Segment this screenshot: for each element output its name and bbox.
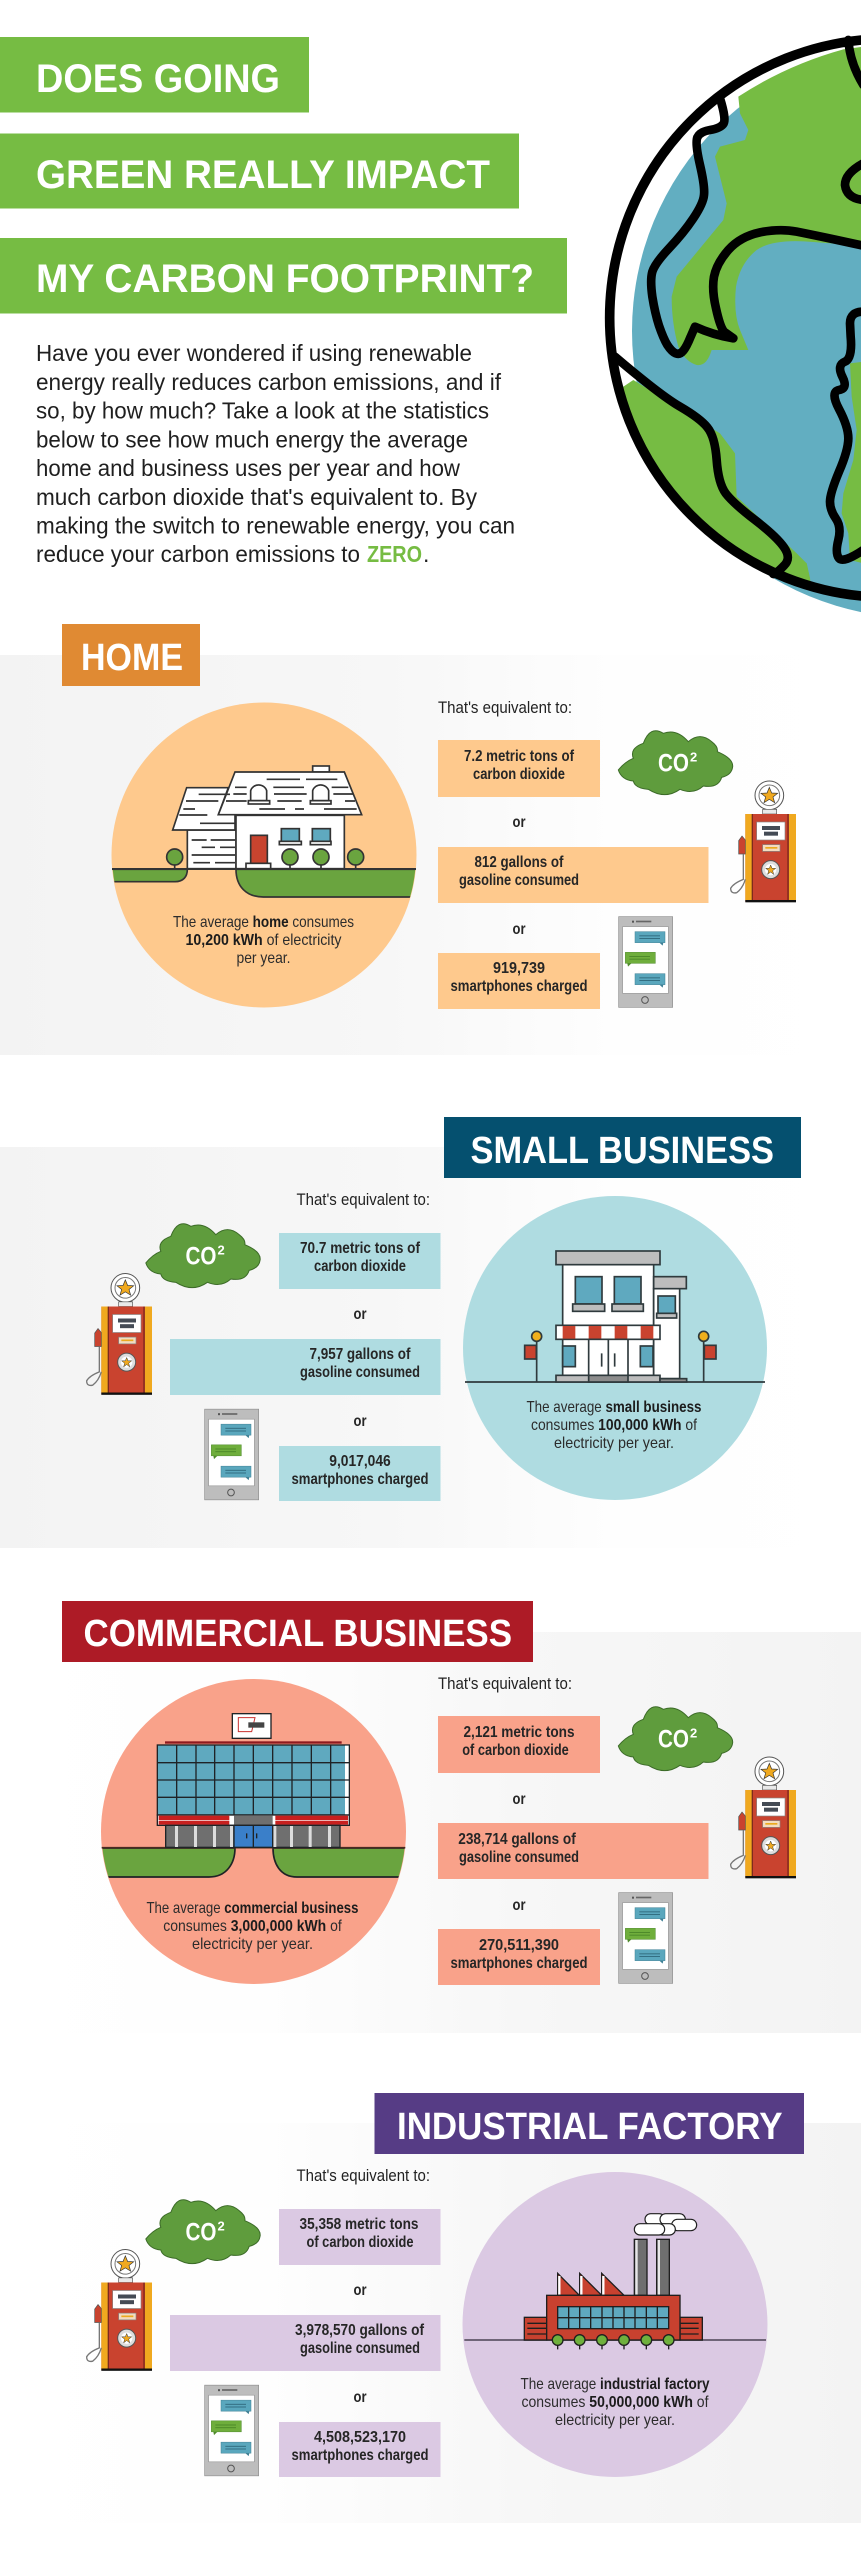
stat text: home: per year. xyxy=(236,950,290,967)
equivalents: commercial business: gasoline consumed xyxy=(459,1849,579,1866)
equivalents: home: or xyxy=(512,814,526,831)
equivalents: commercial business: 2,121 metric tons xyxy=(464,1724,575,1741)
intro text block xyxy=(36,340,515,567)
equivalents: commercial business xyxy=(438,1675,708,1985)
equivalents: commercial business: That's equivalent to: xyxy=(438,1675,572,1693)
stat text: industrial factory: consumes 50,000,000 kWh of xyxy=(522,2394,709,2411)
heading: small business: SMALL BUSINESS xyxy=(470,1130,774,1172)
panel: home xyxy=(0,624,861,1055)
icon: gas pump xyxy=(87,2249,152,2371)
circle: factory illustration and stat xyxy=(462,2172,768,2477)
illustration: house xyxy=(110,766,420,897)
equivalents: industrial factory: That's equivalent to: xyxy=(296,2167,430,2185)
equivalents: industrial factory: smartphones charged xyxy=(292,2447,428,2464)
heading: small business xyxy=(444,1117,801,1178)
icon: smartphone xyxy=(619,1893,673,1983)
stat text: home: 10,200 kWh of electricity xyxy=(186,932,342,949)
heading: industrial factory: INDUSTRIAL FACTORY xyxy=(397,2106,782,2148)
equivalents: commercial business: 238,714 gallons of xyxy=(458,1831,576,1848)
heading: commercial business: COMMERCIAL BUSINESS xyxy=(84,1613,512,1655)
equivalents: home: or xyxy=(512,921,526,938)
intro text block: much carbon dioxide that's equivalent to. By xyxy=(36,484,477,510)
heading: home xyxy=(62,624,200,686)
equivalents: industrial factory xyxy=(170,2167,440,2477)
equivalents: small business: or xyxy=(354,1413,366,1430)
equivalents: industrial factory: 35,358 metric tons xyxy=(300,2216,419,2233)
title: does going green really impact my carbon footprint xyxy=(0,37,567,314)
stat text: home xyxy=(173,914,354,967)
heading: commercial business xyxy=(62,1601,533,1662)
heading: home: HOME xyxy=(81,637,183,679)
icon: gas pump xyxy=(87,1273,152,1395)
icon: co2 cloud: CO xyxy=(658,750,689,778)
panel: commercial business xyxy=(0,1601,861,2033)
circle: small business illustration and stat xyxy=(463,1196,767,1500)
intro text block: . xyxy=(423,541,429,567)
equivalents: industrial factory: or xyxy=(354,2282,366,2299)
intro text block: so, by how much? Take a look at the statistics xyxy=(36,398,489,424)
equivalents: small business: or xyxy=(354,1306,366,1323)
icon: co2 cloud xyxy=(146,1224,260,1288)
icon: smartphone xyxy=(205,1409,259,1500)
stat text: small business xyxy=(526,1399,702,1452)
equivalents: commercial business: or xyxy=(512,1897,526,1914)
equivalents: small business: carbon dioxide xyxy=(314,1258,406,1275)
icon: co2 cloud xyxy=(146,2200,260,2264)
panel: industrial factory xyxy=(0,2093,861,2523)
icon: globe xyxy=(610,39,861,618)
illustration: factory xyxy=(464,2214,766,2349)
icon: co2 cloud xyxy=(618,1707,733,1771)
illustration: shop xyxy=(465,1251,765,1382)
intro text block: energy really reduces carbon emissions, and if xyxy=(36,369,502,395)
illustration: office building xyxy=(100,1714,407,1877)
stat text: small business: electricity per year. xyxy=(554,1435,674,1452)
icon: co2 cloud: 2 xyxy=(218,1242,225,1258)
icon: co2 cloud: 2 xyxy=(218,2218,225,2234)
title: does going green really impact my carbon footprint: MY CARBON FOOTPRINT? xyxy=(36,257,534,301)
stat text: small business: consumes 100,000 kWh of xyxy=(531,1417,697,1434)
equivalents: home: smartphones charged xyxy=(450,978,588,995)
stat text: commercial business xyxy=(146,1900,359,1953)
equivalents: small business xyxy=(170,1191,440,1501)
icon: co2 cloud: CO xyxy=(186,2218,216,2246)
equivalents: small business: gasoline consumed xyxy=(300,1364,420,1381)
equivalents: small business: 9,017,046 xyxy=(329,1453,391,1470)
circle: home illustration and stat xyxy=(110,702,420,1008)
equivalents: commercial business: 270,511,390 xyxy=(479,1937,559,1954)
equivalents: home: That's equivalent to: xyxy=(438,699,572,717)
intro text block: reduce your carbon emissions to xyxy=(36,541,360,567)
icon: smartphone xyxy=(205,2385,259,2476)
equivalents: home: gasoline consumed xyxy=(459,872,579,889)
intro text block: making the switch to renewable energy, you can xyxy=(36,512,515,538)
equivalents: industrial factory: 4,508,523,170 xyxy=(314,2429,406,2446)
equivalents: industrial factory: gasoline consumed xyxy=(300,2340,420,2357)
equivalents: home: 919,739 xyxy=(493,960,545,977)
intro text block: below to see how much energy the average xyxy=(36,426,468,452)
equivalents: home: 7.2 metric tons of xyxy=(464,748,575,765)
title: does going green really impact my carbon footprint: DOES GOING xyxy=(36,57,280,101)
circle: commercial illustration and stat xyxy=(100,1679,407,1984)
stat text: commercial business: electricity per year. xyxy=(192,1936,313,1953)
equivalents: small business: 7,957 gallons of xyxy=(310,1346,411,1363)
equivalents: commercial business: of carbon dioxide xyxy=(462,1742,569,1759)
equivalents: small business: That's equivalent to: xyxy=(296,1191,430,1209)
intro text block: ZERO xyxy=(367,541,422,567)
icon: co2 cloud: 2 xyxy=(690,1726,697,1740)
equivalents: industrial factory: or xyxy=(354,2389,366,2406)
icon: co2 cloud: CO xyxy=(186,1242,216,1270)
icon: gas pump xyxy=(731,1757,796,1878)
equivalents: commercial business: or xyxy=(512,1791,526,1808)
equivalents: industrial factory: of carbon dioxide xyxy=(306,2234,414,2251)
equivalents: home: carbon dioxide xyxy=(473,766,565,783)
stat text: home: The average home consumes xyxy=(173,914,354,931)
equivalents: commercial business: smartphones charged xyxy=(450,1955,588,1972)
stat text: commercial business: consumes 3,000,000 kWh of xyxy=(163,1918,342,1935)
icon: co2 cloud: 2 xyxy=(690,750,697,764)
equivalents: home: 812 gallons of xyxy=(474,854,564,871)
equivalents: home xyxy=(438,699,708,1009)
title: does going green really impact my carbon footprint: GREEN REALLY IMPACT xyxy=(36,153,490,197)
heading: industrial factory xyxy=(374,2093,804,2154)
panel: small business xyxy=(0,1117,861,1548)
stat text: small business: The average small business xyxy=(526,1399,702,1416)
equivalents: industrial factory: 3,978,570 gallons of xyxy=(295,2322,425,2339)
equivalents: small business: smartphones charged xyxy=(292,1471,428,1488)
icon: smartphone xyxy=(619,917,673,1007)
stat text: industrial factory: The average industrial factory xyxy=(520,2376,710,2393)
stat text: industrial factory xyxy=(520,2376,710,2429)
icon: gas pump xyxy=(731,781,796,902)
stat text: industrial factory: electricity per year. xyxy=(555,2412,675,2429)
icon: co2 cloud: CO xyxy=(658,1726,689,1754)
intro text block: Have you ever wondered if using renewable xyxy=(36,340,472,366)
intro text block: home and business uses per year and how xyxy=(36,455,460,481)
stat text: commercial business: The average commercial business xyxy=(146,1900,359,1917)
equivalents: small business: 70.7 metric tons of xyxy=(300,1240,421,1257)
icon: co2 cloud xyxy=(618,731,733,795)
